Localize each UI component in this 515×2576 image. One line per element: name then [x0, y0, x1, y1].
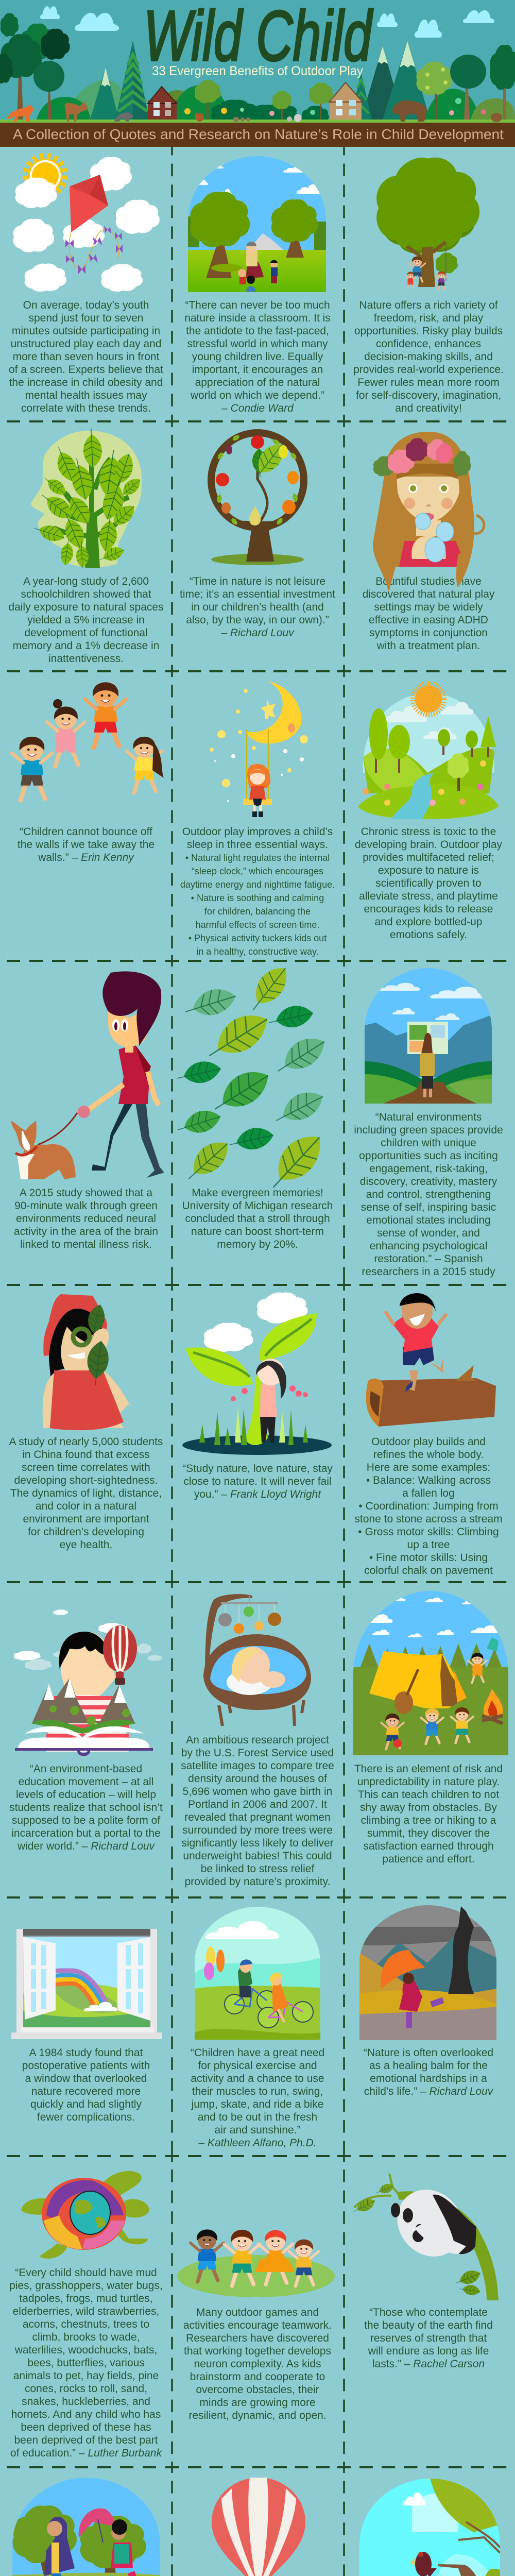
header trees [0, 13, 515, 120]
text: Burbank quote: waterlilies, woodchucks, bats, [15, 2344, 157, 2355]
text: Alfano quote: activity and a chance to use [191, 2072, 324, 2084]
text: Alfano quote: jump, skate, and ride a bike [192, 2098, 323, 2110]
text: Burbank quote: been deprived of the best part [14, 2434, 158, 2446]
text: risky play: and creativity! [395, 402, 462, 414]
text: healing balm quote: “Nature is often overlooked [364, 2046, 493, 2059]
text: forest service study: underweight babies! This could [183, 1850, 332, 1862]
panel: chronic stress [355, 681, 502, 941]
text: Louv investment quote: also, by the way, in our own).” [186, 614, 329, 625]
text: body skills: up a tree [407, 1538, 450, 1551]
text: chronic stress: and explore bottled-up [375, 916, 482, 927]
text: chronic stress: emotions safely. [390, 928, 467, 941]
text: risk in nature play: summit, they discover the [367, 1827, 490, 1839]
text: window study: quickly and had slightly [30, 2098, 142, 2110]
animals [7, 100, 502, 122]
text: short-sightedness [9, 1435, 163, 1551]
text: window study: postoperative patients with [22, 2060, 150, 2071]
text: chronic stress: Chronic stress is toxic to the [361, 825, 496, 838]
text: healing balm quote: emotional hardships in a [370, 2072, 487, 2084]
text: walk study: environments reduced neural [16, 1213, 156, 1225]
text: risk in nature play: This can teach children to not [358, 1789, 499, 1800]
text: memory study: A year-long study of 2,600 [23, 575, 149, 587]
text: risk in nature play: unpredictability in nature play. [357, 1775, 500, 1788]
panel: risk and unpredictability [353, 1591, 508, 1865]
illustration: baby in crib with mobile [203, 1594, 311, 1726]
panel: Kathleen Alfano quote [191, 1907, 324, 2148]
illustration: child with open book of nature [15, 1592, 153, 1755]
text: teamwork: neuron complexity. As kids [194, 2358, 321, 2370]
text: memory study: development of functional [24, 626, 148, 639]
text: evergreen memories: University of Michigan research [182, 1200, 333, 1212]
panel: Frank Lloyd Wright quote [182, 1292, 333, 1500]
illustration: singing bird on a branch [359, 2479, 500, 2576]
text: teamwork [172, 2306, 343, 2422]
panel: screen time statistic [9, 153, 163, 414]
text: Louv education quote: “An environment-based [30, 1763, 142, 1774]
text: Louv education quote: wider world.” – Richard Louv [18, 1840, 154, 1852]
subtitle band [0, 123, 515, 147]
text: risk in nature play: climbing a tree or hiking to a [361, 1815, 496, 1826]
panel: Condie Ward quote [184, 156, 331, 414]
illustration: girl with flower crown and bubbles [373, 432, 485, 592]
text: Condie Ward quote: – Condie Ward [221, 402, 294, 414]
text: Burbank quote: tadpoles, frogs, mud turtles, [19, 2293, 153, 2304]
text: body skills: colorful chalk on pavement [364, 1564, 493, 1577]
text: forest service study [172, 1734, 343, 1888]
panel: window recovery study [0, 1897, 172, 2156]
panel: e.e. cummings quote [12, 2478, 160, 2576]
text: Burbank quote: animals to pet, hay fields, pine [13, 2370, 159, 2381]
text: Condie Ward quote: world on which we depend.” [191, 389, 324, 401]
panel: Erin Kenny quote [10, 682, 164, 863]
hills and mountains [37, 41, 515, 120]
text: short-sightedness: A study of nearly 5,000 students [9, 1435, 163, 1448]
illustration: four children running on grass [177, 2227, 335, 2297]
text: ADHD studies: Bountiful studies have [375, 575, 482, 587]
text: chronic stress: provides multifaceted relief; [363, 851, 494, 863]
illustration: scattered green leaves [177, 968, 324, 1188]
header: title banner with forest scene [0, 0, 515, 147]
text: risky play: decision-making skills, and [364, 351, 493, 363]
text: Burbank quote: cones, rocks to roll, sand, [25, 2382, 147, 2395]
text: ADHD studies: settings may be widely [374, 601, 483, 613]
text: Louv investment quote [180, 575, 335, 639]
text: evergreen memories: memory by 20%. [217, 1239, 298, 1250]
bushes [211, 99, 329, 125]
text: Frank Lloyd Wright quote: you.” – Frank Lloyd Wright [194, 1488, 321, 1500]
text: Burbank quote: bees, butterflies, various [27, 2357, 145, 2369]
text: chronic stress: alleviate stress, and playtime [359, 890, 498, 902]
text: walk study: A 2015 study showed that a [20, 1187, 152, 1199]
text: chronic stress: developing brain. Outdoor play [355, 839, 502, 850]
illustration: girl with umbrella in rain [359, 1905, 496, 2040]
text: Burbank quote: “Every child should have mud [15, 2267, 157, 2278]
text: risky play: provides real-world experience. [353, 364, 504, 376]
text: Louv education quote: education movement – at all [19, 1775, 153, 1788]
text: evergreen memories: Make evergreen memories! [192, 1187, 323, 1199]
illustration: boy balancing on a log [365, 1294, 496, 1427]
text: walk study: activity in the area of the brain [14, 1226, 158, 1238]
text: body skills: • Gross motor skills: Climbing [358, 1526, 499, 1537]
text: Burbank quote: snakes, huckleberries, and [22, 2396, 150, 2407]
text: Spanish researchers quote: including green spaces provide [354, 1124, 503, 1136]
text: risk in nature play [344, 1762, 513, 1865]
text: forest service study: by the U.S. Forest Service used [181, 1747, 334, 1759]
text: short-sightedness: environment are important [23, 1513, 149, 1525]
text: chronic stress: encourages kids to release [364, 903, 493, 915]
panel: Luther Burbank quote [0, 2156, 172, 2467]
panel: outdoor play improves sleep [180, 681, 335, 957]
text: Frank Lloyd Wright quote: “Study nature, love nature, stay [182, 1463, 333, 1475]
text: ADHD studies: effective in easing ADHD [369, 614, 488, 625]
text: Condie Ward quote: young children live. Equally [192, 351, 323, 363]
illustration: girl swinging from crescent moon [210, 681, 308, 817]
text: forest service study: be linked to stress relief [201, 1863, 314, 1875]
text: body skills [344, 1435, 513, 1577]
text: teamwork: brainstorm and cooperate to [190, 2371, 325, 2383]
text: Erin Kenny quote [18, 825, 154, 863]
text: walk study [14, 1187, 158, 1250]
text: forest service study: 5,696 women who gave birth in [183, 1786, 332, 1798]
text: Burbank quote: been deprived of these has [21, 2421, 151, 2433]
text: Burbank quote [0, 2266, 172, 2460]
panel: Plato quote [359, 2479, 500, 2576]
illustration: patterned turtle with earth [21, 2169, 149, 2259]
text: Louv education quote: incarceration but a portal to the [11, 1827, 161, 1839]
text: Frank Lloyd Wright quote [182, 1463, 333, 1500]
text: Louv education quote: supposed to be a polite form of [12, 1815, 160, 1826]
panel: Richard Louv investment quote [180, 429, 335, 639]
text: Spanish researchers quote: enhancing psychological [370, 1240, 487, 1252]
text: Alfano quote: for physical exercise and [198, 2060, 317, 2071]
text: Spanish researchers quote: sense of self, inspiring basic [361, 1201, 496, 1213]
text: sleep benefits: Outdoor play improves a child’s [182, 825, 333, 838]
text: body skills: refines the whole body. [373, 1449, 484, 1460]
text: memory study: schoolchildren showed that [21, 588, 151, 600]
text: teamwork: activities encourage teamwork. [183, 2319, 332, 2331]
text: Spanish researchers quote: restoration.” – Spanish [374, 1253, 483, 1265]
text: Burbank quote: elderberries, wild strawberries, [13, 2305, 159, 2317]
panel: teamwork [172, 2156, 343, 2467]
illustration: hiker reading a map [365, 968, 492, 1104]
text: Spanish researchers quote: researchers in a 2015 study [362, 1266, 495, 1278]
text: evergreen memories [182, 1187, 333, 1250]
text: forest service study: significantly less likely to deliver [181, 1837, 334, 1849]
illustration: camping scene [353, 1591, 508, 1755]
text: screen time: spend just four to seven [29, 312, 143, 324]
text: Erin Kenny quote: walls.” – Erin Kenny [38, 851, 134, 863]
text: Alfano quote: “Children have a great need [191, 2046, 324, 2059]
text: forest service study: provided by nature’s proximity. [185, 1876, 330, 1888]
text: short-sightedness: for children’s developing [28, 1526, 144, 1537]
panel: 90-minute walk study [11, 971, 164, 1250]
illustration: children riding bicycles [195, 1907, 320, 2040]
illustration: storytelling under trees [188, 156, 326, 292]
panel: screen time and short-sightedness [9, 1294, 163, 1551]
text: sleep benefits: “sleep clock,” which encourages [192, 866, 323, 876]
text: Carson quote: lasts.” – Rachel Carson [372, 2358, 485, 2370]
text: body skills: stone to stone across a stream [354, 1513, 503, 1525]
text: Carson quote: will endure as long as life [368, 2345, 489, 2357]
text: Carson quote [344, 2306, 513, 2370]
text: body skills: • Balance: Walking across [366, 1475, 491, 1486]
panel: vast and ever-evolving play [172, 2467, 343, 2576]
panel: whole-body development [354, 1293, 503, 1577]
illustration: children in puddle with umbrella [12, 2478, 160, 2576]
panel: tree density study [172, 1582, 343, 1897]
text: Spanish researchers quote: and control, strengthening [366, 1189, 491, 1200]
text: sleep benefits: • Nature is soothing and calming [191, 892, 324, 903]
text: Louv investment quote: time; it’s an essential investment [180, 588, 335, 600]
text: short-sightedness: and color in a natural [36, 1500, 136, 1512]
text: ADHD studies: discovered that natural play [363, 588, 494, 600]
text: sleep benefits: in a healthy, constructive way. [196, 946, 319, 956]
text: sleep benefits [180, 825, 335, 957]
panel: environment-based education [0, 1582, 172, 1897]
text: ADHD studies [363, 575, 494, 651]
header clouds [40, 6, 494, 38]
text: screen time: correlate with these trends. [21, 402, 151, 414]
text: Condie Ward quote: nature inside a classroom. It is [184, 312, 331, 324]
text: sleep benefits: harmful effects of screen time. [196, 919, 319, 929]
text: Condie Ward quote: appreciation of the natural [195, 377, 320, 388]
text: Alfano quote: air and sunshine.” [215, 2124, 300, 2136]
text: body skills: • Coordination: Jumping from [358, 1500, 499, 1512]
text: window study [0, 2046, 172, 2124]
text: body skills: Outdoor play builds and [371, 1435, 486, 1448]
text: body skills: • Fine motor skills: Using [369, 1552, 488, 1563]
text: forest service study: density around the houses of [188, 1773, 327, 1785]
text: teamwork: that working together develops [184, 2345, 331, 2357]
text: risky play: freedom, risk, and play [374, 312, 483, 324]
text: Spanish researchers quote: emotional states including [366, 1214, 491, 1226]
text: risk in nature play: satisfaction earned through [363, 1840, 494, 1852]
text: forest service study: satellite images to compare tree [181, 1760, 334, 1772]
text: Burbank quote: climb, brooks to wade, [32, 2331, 140, 2343]
text: chronic stress: scientifically proven to [375, 877, 482, 889]
text: forest service study: Portland in 2006 and 2007. It [188, 1799, 327, 1810]
text: healing balm quote: child’s life.” – Richard Louv [364, 2086, 493, 2097]
illustration: girl hugging a plant [182, 1292, 332, 1455]
text: healing balm quote: as a healing balm for the [369, 2060, 488, 2071]
text: window study: fewer complications. [37, 2111, 135, 2123]
text: Alfano quote: and to be out in the fresh [198, 2111, 317, 2123]
text: sleep benefits: for children, balancing the [204, 906, 311, 916]
text: screen time: unstructured play each day and [10, 338, 162, 350]
illustration: fruit ring tree [208, 429, 307, 565]
text: Spanish researchers quote: engagement, risk-taking, [369, 1163, 488, 1175]
text: window study: a window that overlooked [25, 2072, 147, 2084]
house: red [148, 87, 177, 120]
text: Louv education quote: students realize that school isn’t [9, 1801, 163, 1814]
text: risky play: Fewer rules mean more room [357, 377, 500, 388]
text: risk in nature play: shy away from obstacles. By [360, 1801, 497, 1814]
text: screen time: On average, today’s youth [23, 299, 149, 311]
text: Burbank quote: acorns, chestnuts, trees to [23, 2318, 149, 2330]
text: body skills: Here are some examples: [367, 1461, 490, 1473]
text: Condie Ward quote: “There can never be too much [185, 299, 330, 311]
illustration: meadow with stream and sun [358, 681, 499, 819]
text: Spanish researchers quote: opportunities such as inciting [359, 1150, 498, 1162]
text: Alfano quote: – Kathleen Alfano, Ph.D. [198, 2137, 317, 2148]
text: teamwork: overcome obstacles, their [196, 2384, 319, 2396]
text: screen time: minutes outside participating in [12, 325, 160, 337]
panel: Rachel Carson quote [344, 2156, 513, 2467]
text: risk in nature play: patience and effort. [382, 1853, 475, 1865]
text: chronic stress: exposure to nature is [378, 865, 479, 876]
text: evergreen memories: nature can boost short-term [191, 1226, 324, 1238]
text: Erin Kenny quote: “Children cannot bounce off [20, 825, 152, 838]
text: Louv investment quote: “Time in nature is not leisure [190, 575, 325, 587]
text: Louv education quote [0, 1762, 172, 1853]
text: risky play: for self-discovery, imagination, [356, 389, 501, 401]
text: ADHD studies: with a treatment plan. [377, 640, 480, 651]
house: tan [329, 82, 363, 120]
panel: evergreen memories [177, 968, 333, 1250]
panel: healing balm quote [359, 1905, 496, 2097]
panel: Spanish researchers quote [354, 968, 503, 1278]
panel: risky play [353, 158, 504, 414]
text: screen time [9, 299, 163, 414]
text: Alfano quote [172, 2046, 343, 2149]
text: risk in nature play: There is an element of risk and [354, 1763, 503, 1774]
text: memory study: inattentiveness. [48, 652, 124, 665]
text: short-sightedness: in China found that excess [22, 1449, 150, 1460]
text: Condie Ward quote: stressful world in which many [187, 338, 328, 350]
flowers [184, 98, 486, 116]
text: short-sightedness: eye health. [60, 1538, 112, 1551]
text: window study: A 1984 study found that [29, 2046, 143, 2059]
text: Burbank quote: of education.” – Luther Burbank [10, 2447, 162, 2459]
text: Burbank quote: hornets. And any child who has [11, 2408, 161, 2420]
illustration: man walking corgi dog [11, 971, 164, 1179]
illustration: tree inside head silhouette [31, 429, 142, 568]
text: Carson quote: reserves of strength that [370, 2332, 487, 2344]
panel: ADHD studies [363, 432, 494, 651]
text: screen time: more than seven hours in front [13, 351, 159, 363]
text: Spanish researchers quote [354, 1111, 503, 1278]
subtitle band: A Collection of Quotes and Research on Nature’s Role in Child Development [13, 126, 504, 142]
illustration: kids in a large tree [376, 158, 480, 291]
text: sleep benefits: • Physical activity tuckers kids out [188, 933, 327, 943]
text: body skills: a fallen log [402, 1487, 455, 1499]
text: Condie Ward quote: the antidote to the fast-paced, [186, 325, 329, 337]
text: memory study [8, 575, 164, 665]
text: teamwork: minds are growing more [199, 2397, 316, 2409]
text: screen time: the increase in child obesity and [9, 377, 163, 388]
text: Frank Lloyd Wright quote: close to nature. It will never fail [183, 1476, 332, 1487]
text: risky play: confidence, enhances [376, 338, 481, 350]
text: forest service study: revealed that pregnant women [184, 1811, 331, 1823]
text: Burbank quote: pies, grasshoppers, water bugs, [9, 2279, 163, 2292]
text: teamwork: Researchers have discovered [186, 2332, 329, 2344]
text: forest service study: surrounded by more trees were [182, 1824, 333, 1836]
text: Louv investment quote: in our children’s health (and [191, 601, 324, 613]
text: screen time: mental health issues may [25, 389, 147, 401]
text: forest service study: An ambitious research project [186, 1734, 329, 1746]
text: Spanish researchers quote: children with unique [381, 1137, 476, 1149]
text: short-sightedness: screen time correlates with [22, 1461, 150, 1473]
subtitle: 33 Evergreen Benefits of Outdoor Play [152, 64, 363, 78]
text: ADHD studies: symptoms in conjunction [369, 626, 488, 639]
text: Condie Ward quote [184, 299, 331, 414]
text: Carson quote: the beauty of the earth find [364, 2319, 493, 2331]
text: memory study: daily exposure to natural spaces [8, 601, 164, 613]
illustration: hot air balloon [212, 2478, 305, 2576]
text: Condie Ward quote: important, it encourages an [192, 364, 323, 376]
text: Louv investment quote: – Richard Louv [221, 626, 294, 639]
illustration: open window with rainbow [11, 1929, 162, 2039]
text: Spanish researchers quote: “Natural environments [375, 1111, 482, 1123]
text: chronic stress [355, 825, 502, 941]
text: sleep benefits: • Natural light regulates the internal [185, 852, 330, 862]
text: short-sightedness: The dynamics of light, distance, [10, 1487, 162, 1499]
text: evergreen memories: concluded that a stroll through [185, 1213, 330, 1225]
illustration: four jumping children [10, 682, 164, 803]
text: window study: nature recovered more [31, 2086, 141, 2097]
text: teamwork: Many outdoor games and [196, 2307, 319, 2318]
text: Louv education quote: levels of education – will help [16, 1789, 156, 1800]
text: risky play [353, 299, 504, 414]
text: short-sightedness: developing short-sightedness. [14, 1475, 158, 1486]
illustration: girl holding leaves to her eyes [42, 1294, 131, 1430]
text: screen time: of a screen. Experts believe that [9, 364, 163, 376]
text: Erin Kenny quote: the walls if we take away the [18, 839, 154, 850]
illustration: kite and clouds [13, 153, 160, 292]
text: risky play: opportunities. Risky play builds [354, 325, 503, 337]
text: walk study: linked to mental illness risk. [20, 1239, 152, 1250]
text: Alfano quote: their muscles to run, swing, [192, 2086, 323, 2097]
text: memory study: yielded a 5% increase in [27, 614, 145, 625]
text: Spanish researchers quote: sense of wonder, and [377, 1227, 480, 1239]
text: teamwork: resilient, dynamic, and open. [188, 2410, 327, 2421]
text: Spanish researchers quote: discovery, creativity, mastery [360, 1176, 497, 1188]
text: walk study: 90-minute walk through green [14, 1200, 158, 1212]
text: healing balm quote [344, 2046, 513, 2098]
text: Carson quote: “Those who contemplate [369, 2307, 488, 2318]
text: sleep benefits: daytime energy and nighttime fatigue. [180, 879, 335, 889]
text: memory study: memory and a 1% decrease in [13, 640, 159, 651]
illustration: panda on bamboo [354, 2174, 503, 2301]
text: sleep benefits: sleep in three essential ways. [187, 839, 328, 850]
panel: functional memory study [8, 429, 164, 665]
text: risky play: Nature offers a rich variety of [359, 299, 498, 311]
